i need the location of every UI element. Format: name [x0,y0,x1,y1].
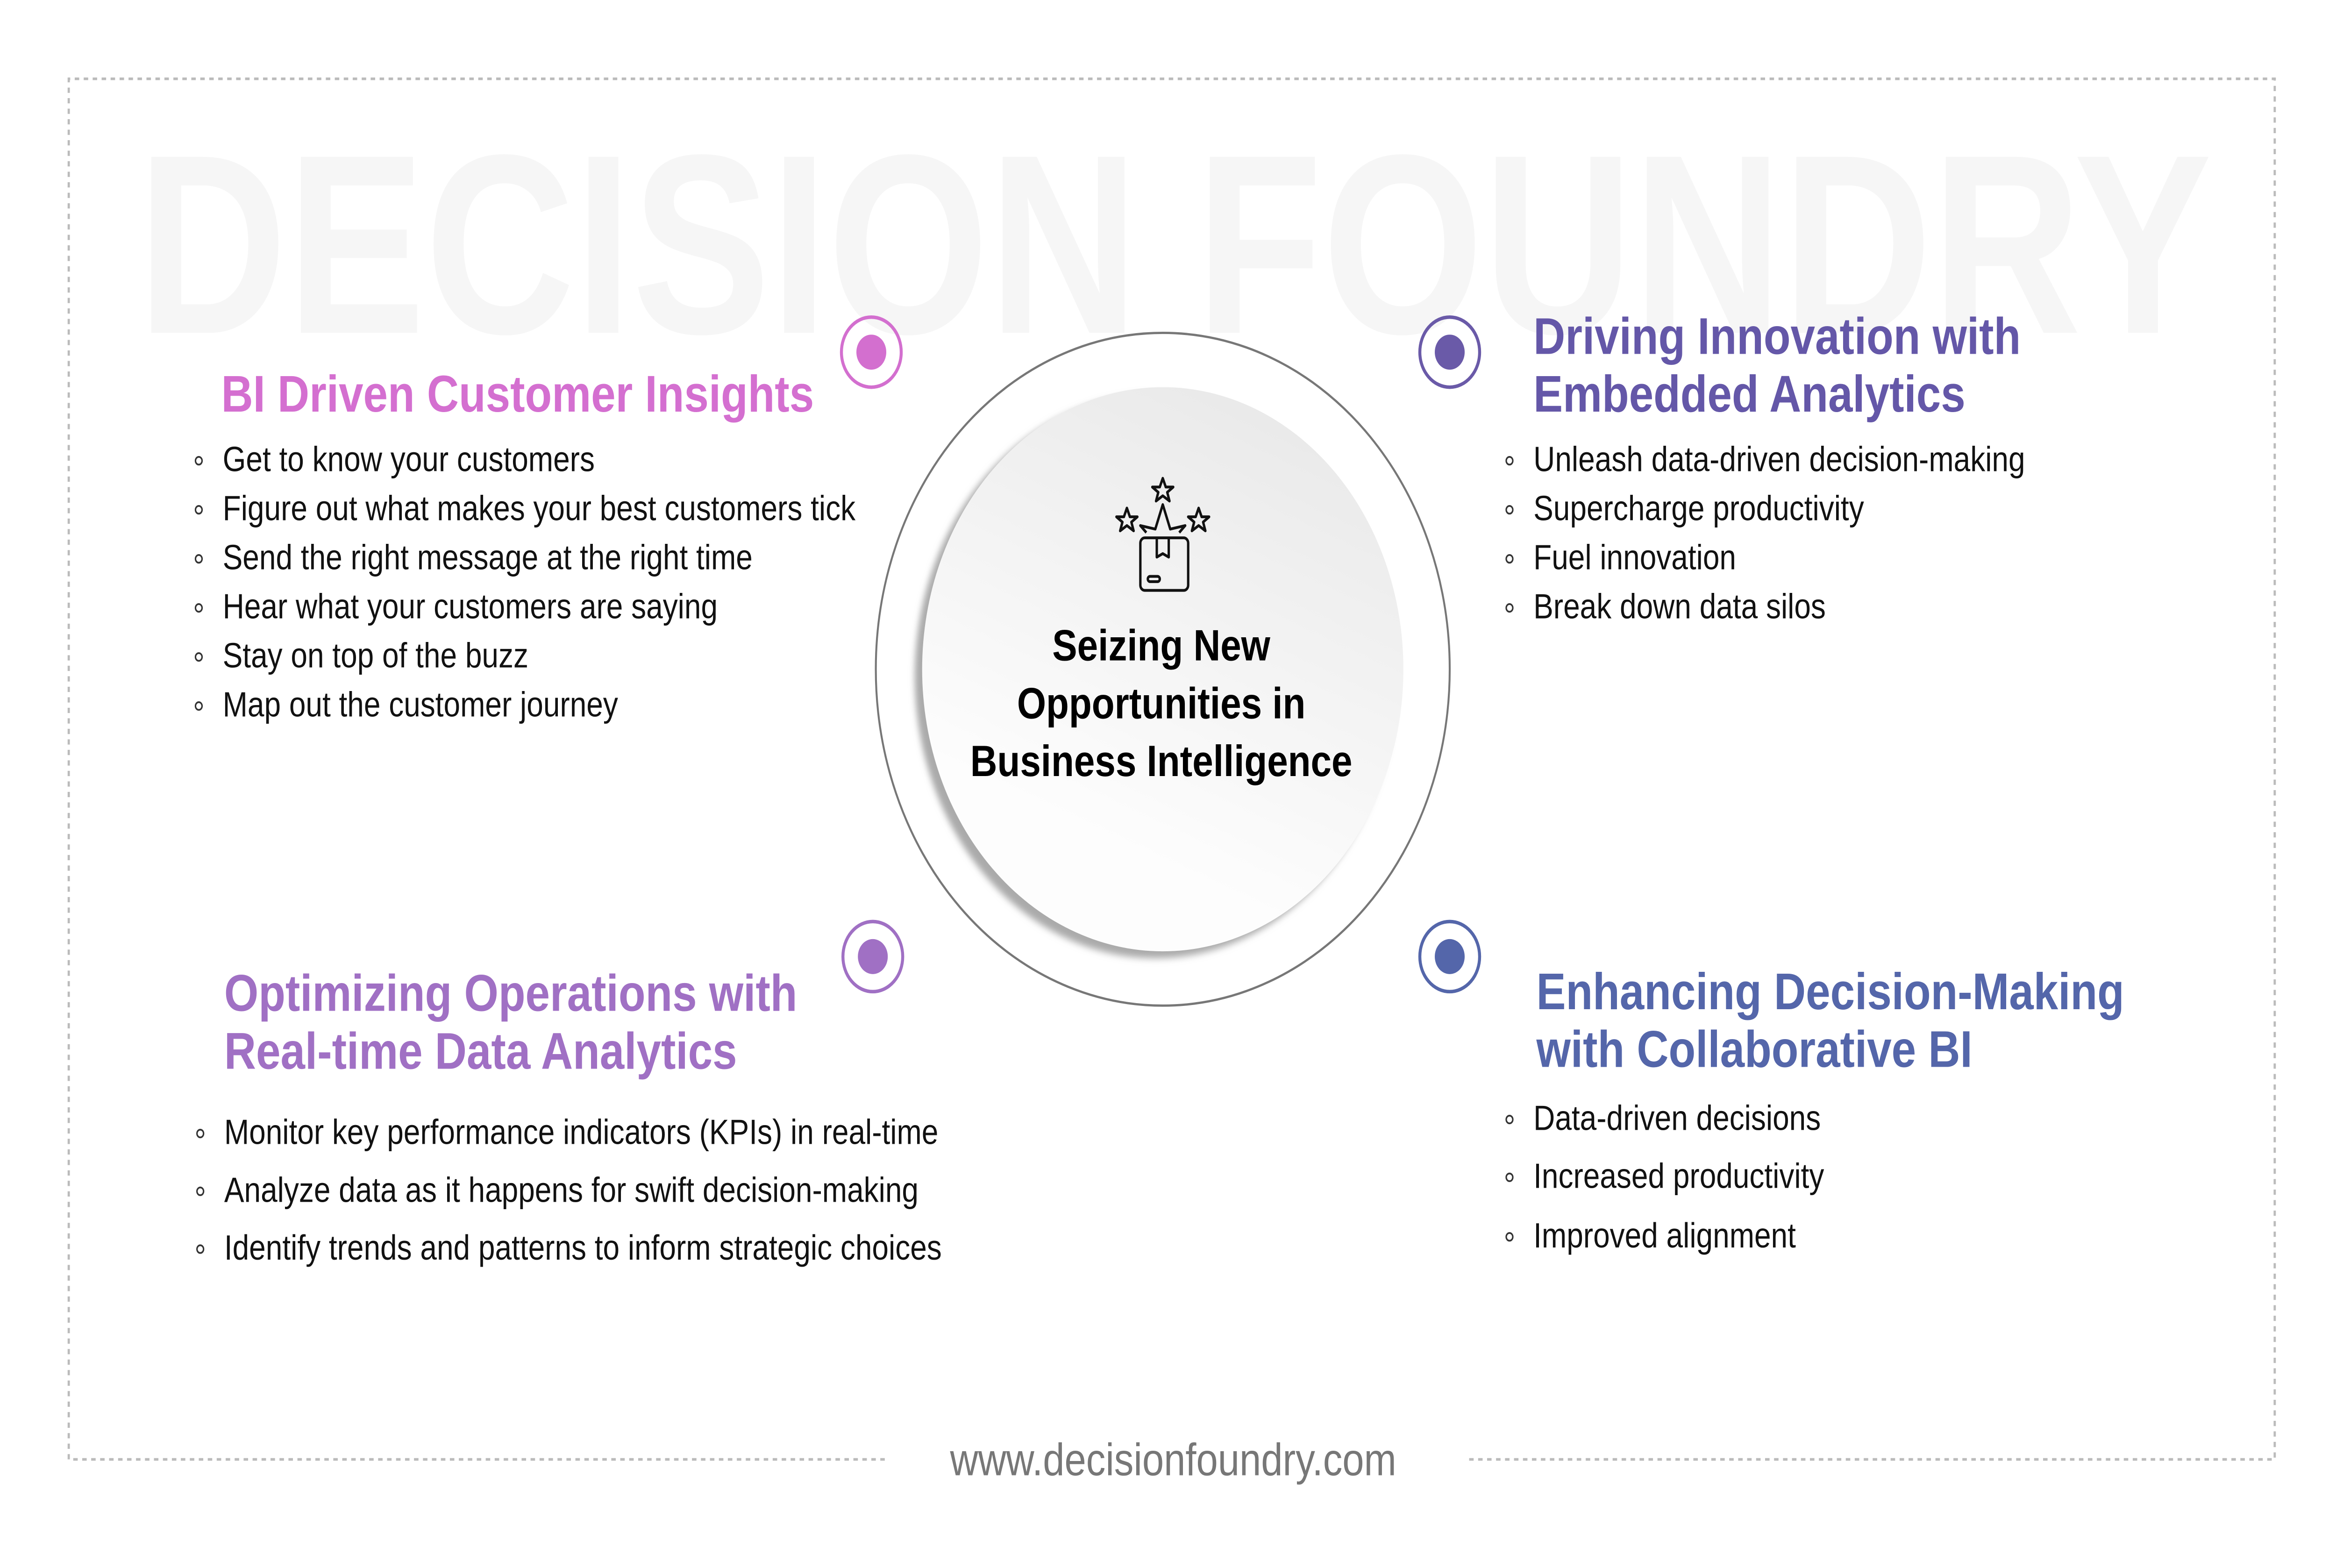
icon: box with stars [1117,478,1209,591]
panel: Driving Innovation [1506,307,2025,626]
bullet list: Figure out what makes your best customers tick [223,489,855,528]
bullet list: Get to know your customers [223,440,595,479]
bullet list: Increased productivity [1533,1156,1824,1195]
heading [224,964,797,1080]
center circle [876,333,1450,1005]
bullet list: Data-driven decisions [1533,1098,1821,1138]
center title: Business Intelligence [970,737,1352,786]
center title [970,621,1352,786]
bullet list: Map out the customer journey [223,685,618,724]
bullet list: Break down data silos [1533,587,1826,626]
bullet list: Analyze data as it happens for swift decision-making [224,1170,919,1209]
heading: Driving Innovation with [1533,307,2021,365]
bullet list: Unleash data-driven decision-making [1533,440,2025,479]
heading: BI Driven Customer Insights [221,365,814,423]
heading: Real-time Data Analytics [224,1022,737,1080]
center title: Seizing New [1052,621,1270,670]
icon: dot violet [843,921,903,991]
bullet list [1506,1098,1824,1255]
bullet list [195,440,855,724]
panel: Enhancing Decision-Making [1506,962,2124,1255]
bullet list [1506,440,2025,626]
heading: Embedded Analytics [1533,365,1966,423]
heading [1536,962,2124,1078]
panel: Optimizing Operations [197,964,942,1267]
footer url: www.decisionfoundry.com [950,1434,1396,1485]
icon: dot pink [841,317,901,387]
bullet list: Send the right message at the right time [223,538,753,577]
bullet list: Monitor key performance indicators (KPIs) in real-time [224,1112,938,1152]
heading: Enhancing Decision-Making [1537,962,2124,1020]
heading: with Collaborative BI [1536,1020,1973,1078]
bullet list: Improved alignment [1533,1216,1796,1255]
bullet list: Supercharge productivity [1533,489,1864,528]
bullet list: Fuel innovation [1533,538,1736,577]
panel: BI Driven Customer Insights [195,365,855,724]
bullet list: Identify trends and patterns to inform strategic choices [224,1228,942,1267]
icon: dot purple [1420,317,1480,387]
bullet list [197,1112,942,1267]
heading: Optimizing Operations with [224,964,797,1022]
bullet list: Stay on top of the buzz [223,636,528,675]
icon: dot blue [1420,921,1480,991]
heading [1533,307,2021,423]
center title: Opportunities in [1017,679,1305,728]
watermark: DECISION FOUNDRY [137,101,2212,387]
bullet list: Hear what your customers are saying [223,587,718,626]
